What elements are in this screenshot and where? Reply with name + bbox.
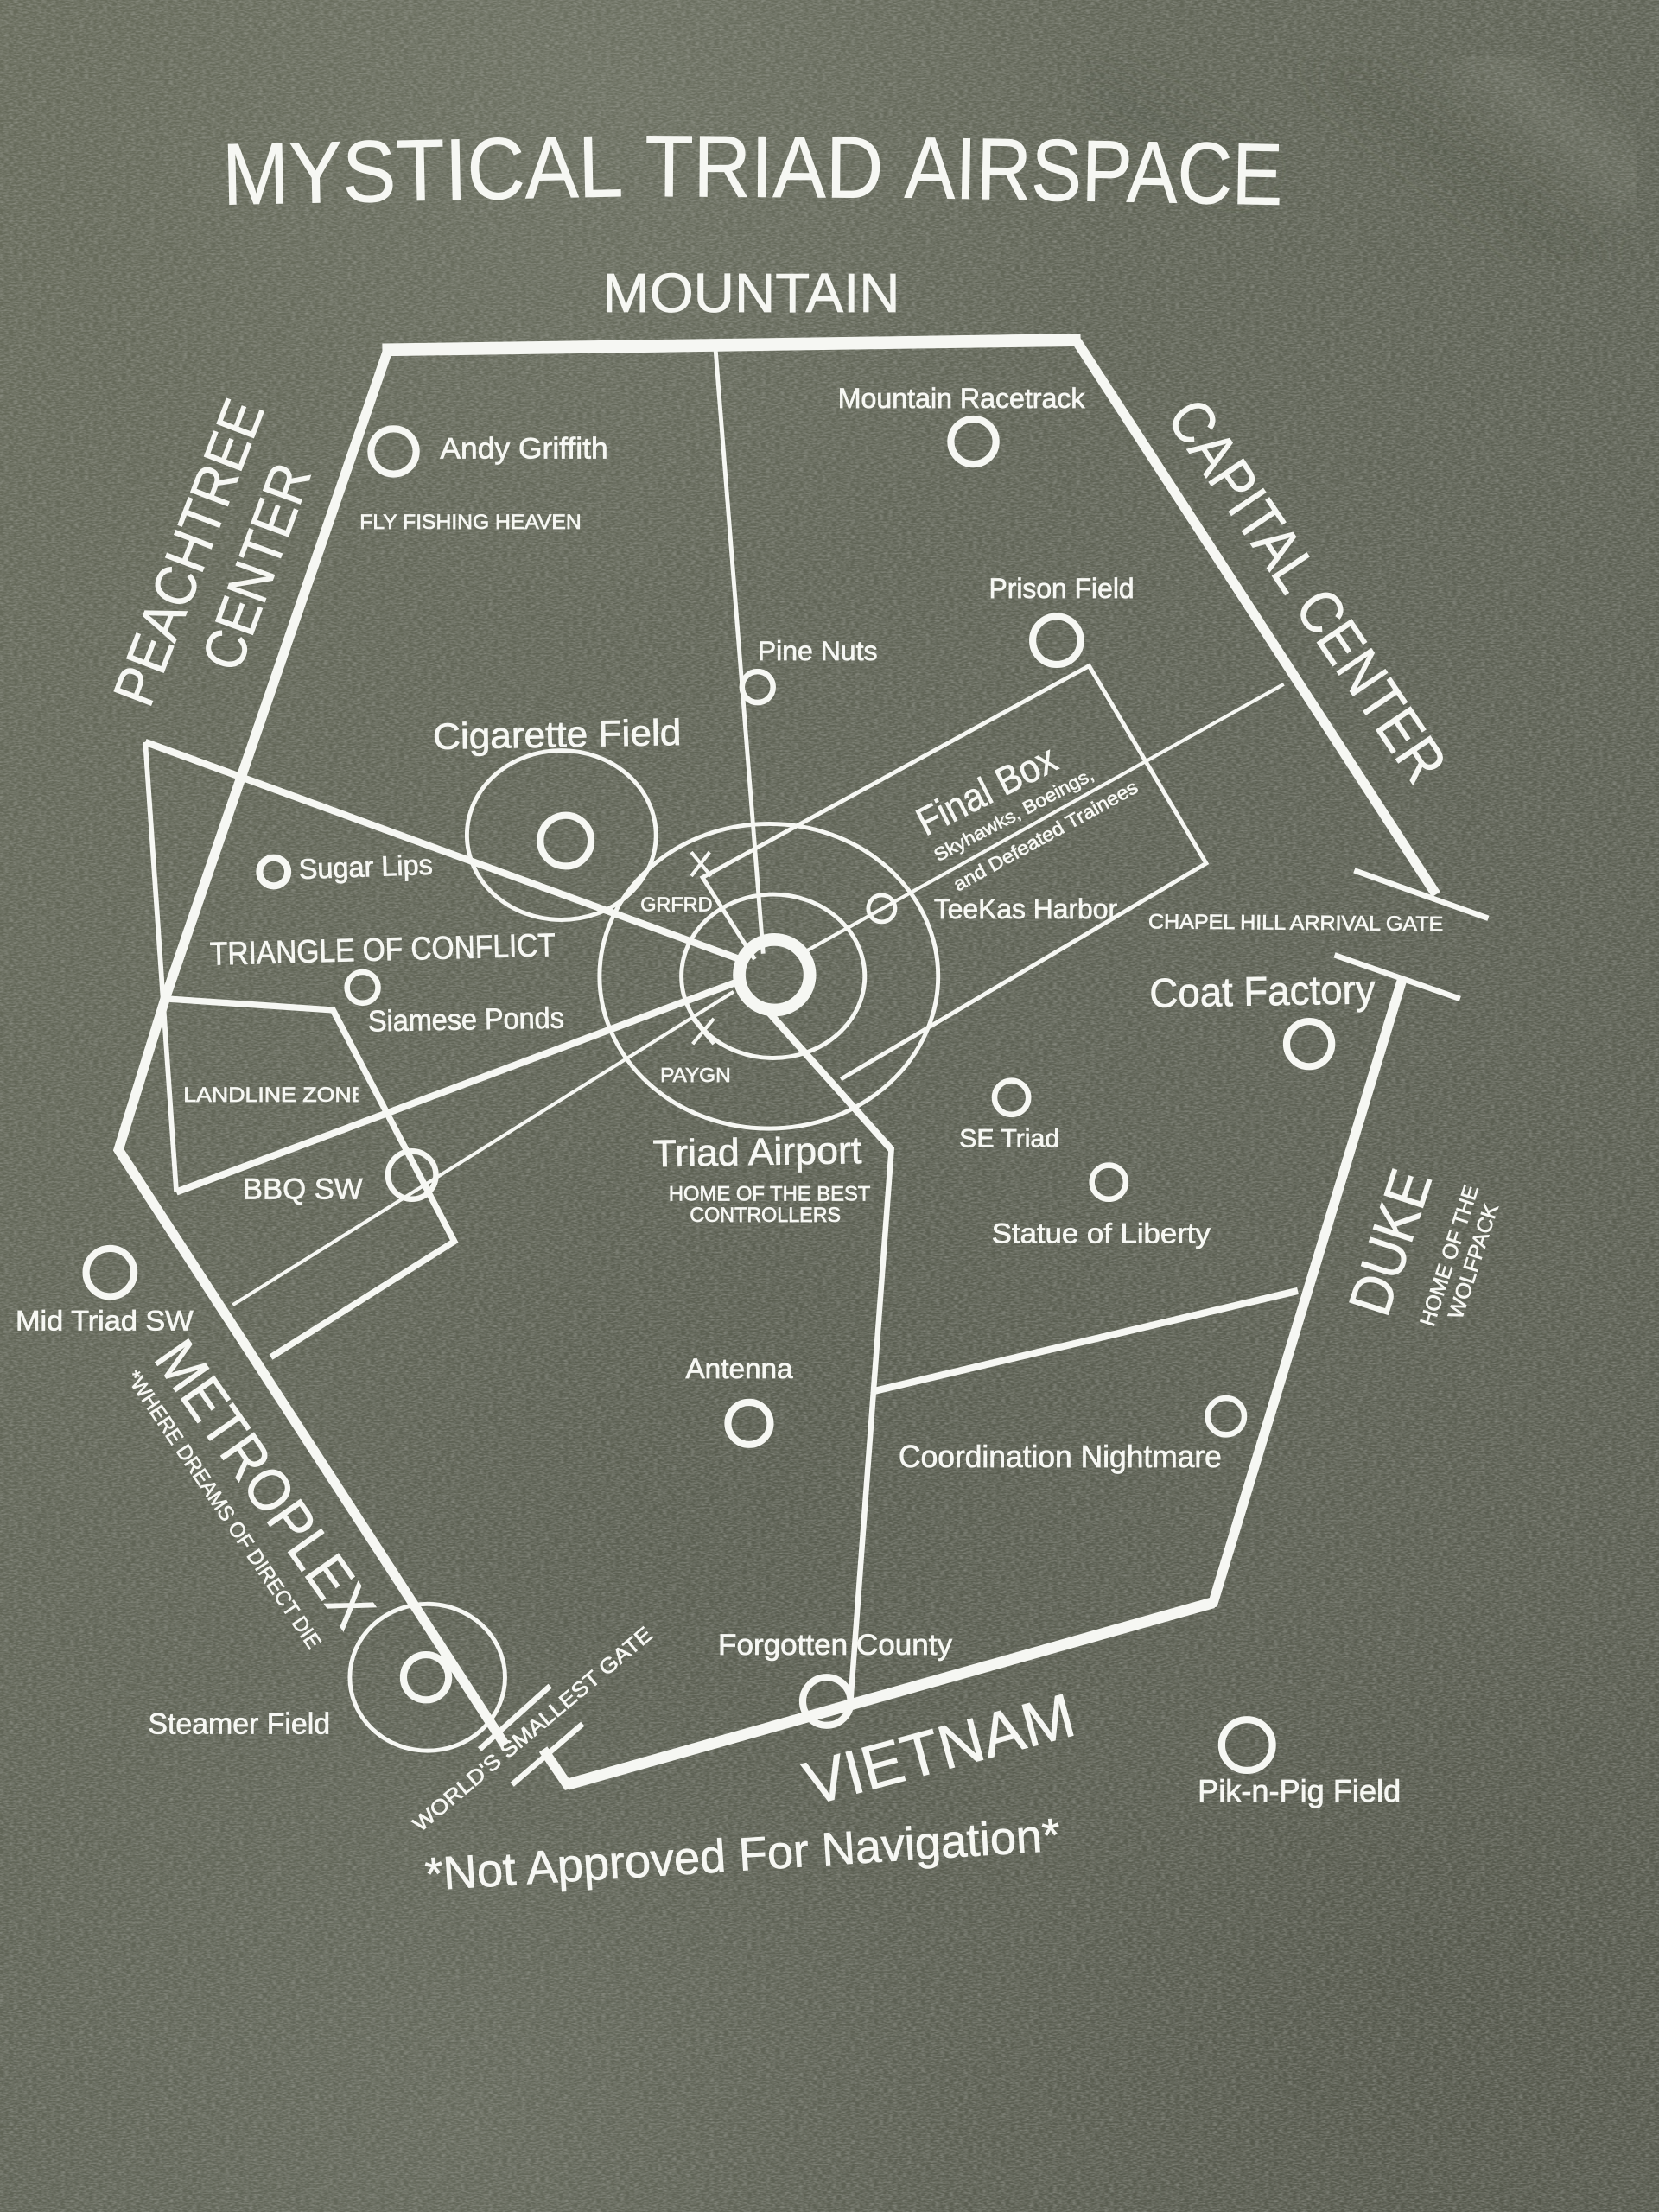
airport rings [600, 823, 938, 1128]
airfield and area labels: Skyhawks, Boeings, [931, 765, 1097, 866]
triangle of conflict [145, 742, 747, 1192]
airfield and area labels: PAYGN [660, 1064, 731, 1086]
final box [702, 666, 1206, 1079]
Vietnam Duke divider [874, 1291, 1298, 1391]
airfield and area labels: BBQ SW [243, 1173, 363, 1206]
sector labels: DUKE [1336, 1161, 1445, 1323]
airfield and area labels: Statue of Liberty [992, 1217, 1211, 1249]
triangle left edge [145, 742, 176, 1192]
sector labels: CENTER [190, 455, 324, 679]
sector labels: MOUNTAIN [602, 263, 900, 324]
airfield and area labels: Coat Factory [1149, 967, 1376, 1017]
airfield and area labels: TeeKas Harbor [934, 893, 1117, 925]
sector labels: PEACHTREE [101, 391, 276, 715]
sector labels [101, 263, 1503, 1819]
airfield and area labels: Siamese Ponds [368, 1002, 564, 1038]
airfield and area labels: Sugar Lips [298, 849, 433, 885]
airfield and area labels: Steamer Field [148, 1708, 330, 1741]
airfield and area labels: Andy Griffith [440, 433, 608, 466]
airfield and area labels: FLY FISHING HEAVEN [359, 511, 582, 534]
airfield and area labels: HOME OF THE BEST [669, 1182, 870, 1205]
sector labels: HOME OF THE [1416, 1182, 1484, 1329]
sector labels: WOLFPACK [1444, 1200, 1503, 1322]
airfield and area labels: Final Box [909, 736, 1064, 844]
title: MYSTICAL [221, 118, 624, 224]
bottom boundary edge [567, 1603, 1213, 1784]
top boundary edge [382, 340, 1081, 350]
airfield and area labels: Forgotten County [718, 1629, 953, 1662]
airfield and area labels: Pik-n-Pig Field [1198, 1773, 1401, 1808]
Triad east boundary [762, 1004, 892, 1150]
landline zone [167, 999, 454, 1357]
airfield and area labels: and Defeated Trainees [950, 776, 1141, 895]
approach fix marks [691, 852, 714, 1044]
airfield and area labels: Antenna [685, 1352, 793, 1384]
title: TRIAD [645, 118, 884, 217]
sector labels: METROPLEX [142, 1328, 388, 1640]
cigarette field rings [467, 751, 656, 919]
airfield and area labels: Mountain Racetrack [838, 382, 1085, 414]
airfield and area labels: Cigarette Field [433, 712, 682, 757]
gate ticks [480, 870, 1488, 1784]
airfield and area labels: Mid Triad SW [16, 1305, 194, 1337]
airfield and area labels [16, 382, 1443, 1836]
mountain sector divider [715, 346, 763, 954]
title [221, 118, 1284, 224]
airfield and area labels: TRIANGLE OF CONFLICT [209, 926, 556, 972]
airfield and area labels: SE Triad [959, 1124, 1059, 1153]
sector labels: VIETNAM [797, 1681, 1082, 1819]
airfield and area labels: Prison Field [988, 572, 1135, 604]
steamer field rings [350, 1604, 505, 1751]
airfield and area labels: WORLD'S SMALLEST GATE [409, 1623, 658, 1836]
airfield and area labels: LANDLINE ZONE [183, 1084, 366, 1107]
airfield markers [86, 419, 1332, 1770]
airfield and area labels: Triad Airport [652, 1129, 862, 1175]
airfield and area labels: CONTROLLERS [690, 1204, 841, 1227]
Forgotten County divider [850, 1147, 892, 1700]
title: AIRSPACE [904, 119, 1284, 224]
navigation disclaimer: *Not Approved For Navigation* [423, 1809, 1062, 1901]
airfield and area labels: CHAPEL HILL ARRIVAL GATE [1148, 911, 1443, 936]
extended runway line [232, 684, 1284, 1305]
airfield and area labels: Coordination Nightmare [899, 1439, 1222, 1474]
airspace map lines [86, 339, 1488, 1784]
airfield and area labels: Pine Nuts [758, 636, 878, 666]
airfield and area labels: GRFRD [640, 893, 712, 916]
outer airspace boundary [118, 339, 1436, 1784]
sector labels: CAPITAL CENTER [1154, 386, 1460, 794]
sector labels: *WHERE DREAMS OF DIRECT DIE [121, 1367, 325, 1654]
